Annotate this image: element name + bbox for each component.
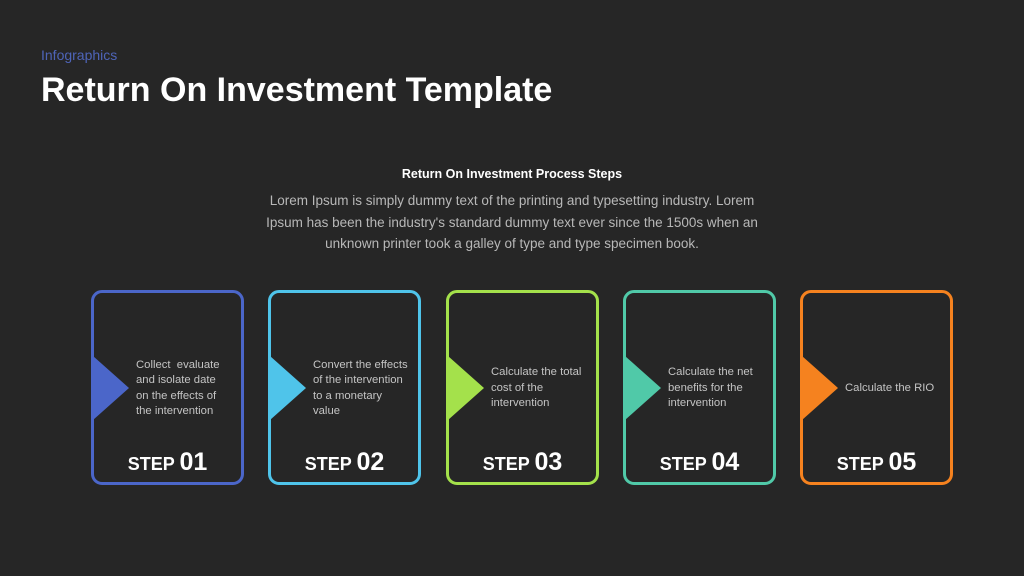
card: step 04 [623, 290, 776, 485]
text 04 [668, 366, 753, 409]
description text: Lorem Ipsum is simply dummy text of the printing and typesetting industry. Lorem Ipsum has been the industry's standard dummy text ever since the 1500s when an unknown printer took a galley of type and type specimen book. [266, 193, 758, 251]
card: step 05 [800, 290, 953, 485]
subtitle label: Infographics [41, 47, 117, 63]
text 01: on the effects of [136, 390, 216, 402]
text 03: Calculate the total [491, 366, 581, 378]
step label 05: STEP 05 [837, 448, 916, 476]
title: Return On Investment Template [41, 71, 552, 109]
icon: arrow 05 [802, 356, 838, 420]
card: step 02 [268, 290, 421, 485]
text 01: Collect evaluate [136, 358, 220, 370]
text 02: Convert the effects [313, 358, 408, 370]
step label 02: STEP 02 [305, 448, 384, 476]
text 01: and isolate date [136, 374, 216, 386]
text 03: intervention [491, 397, 549, 409]
text 03 [491, 366, 581, 409]
text 04: intervention [668, 397, 726, 409]
icon: arrow 02 [270, 356, 306, 420]
text 05: Calculate the RIO [845, 382, 934, 394]
icon: arrow 01 [93, 356, 129, 420]
text 02 [313, 358, 408, 417]
icon: arrow 04 [625, 356, 661, 420]
step label 03: STEP 03 [483, 448, 562, 476]
text 03: cost of the [491, 382, 543, 394]
card: step 03 [446, 290, 599, 485]
text 04: Calculate the net [668, 366, 753, 378]
text 02: value [313, 405, 340, 417]
text 01 [136, 358, 220, 417]
text 04: benefits for the [668, 382, 743, 394]
step label 01: STEP 01 [128, 448, 207, 476]
icon: arrow 03 [448, 356, 484, 420]
section heading: Return On Investment Process Steps [402, 167, 622, 181]
step label 04: STEP 04 [660, 448, 739, 476]
text 01: the intervention [136, 405, 213, 417]
text 02: to a monetary [313, 390, 382, 402]
text 02: of the intervention [313, 374, 403, 386]
card: step 01 [91, 290, 244, 485]
